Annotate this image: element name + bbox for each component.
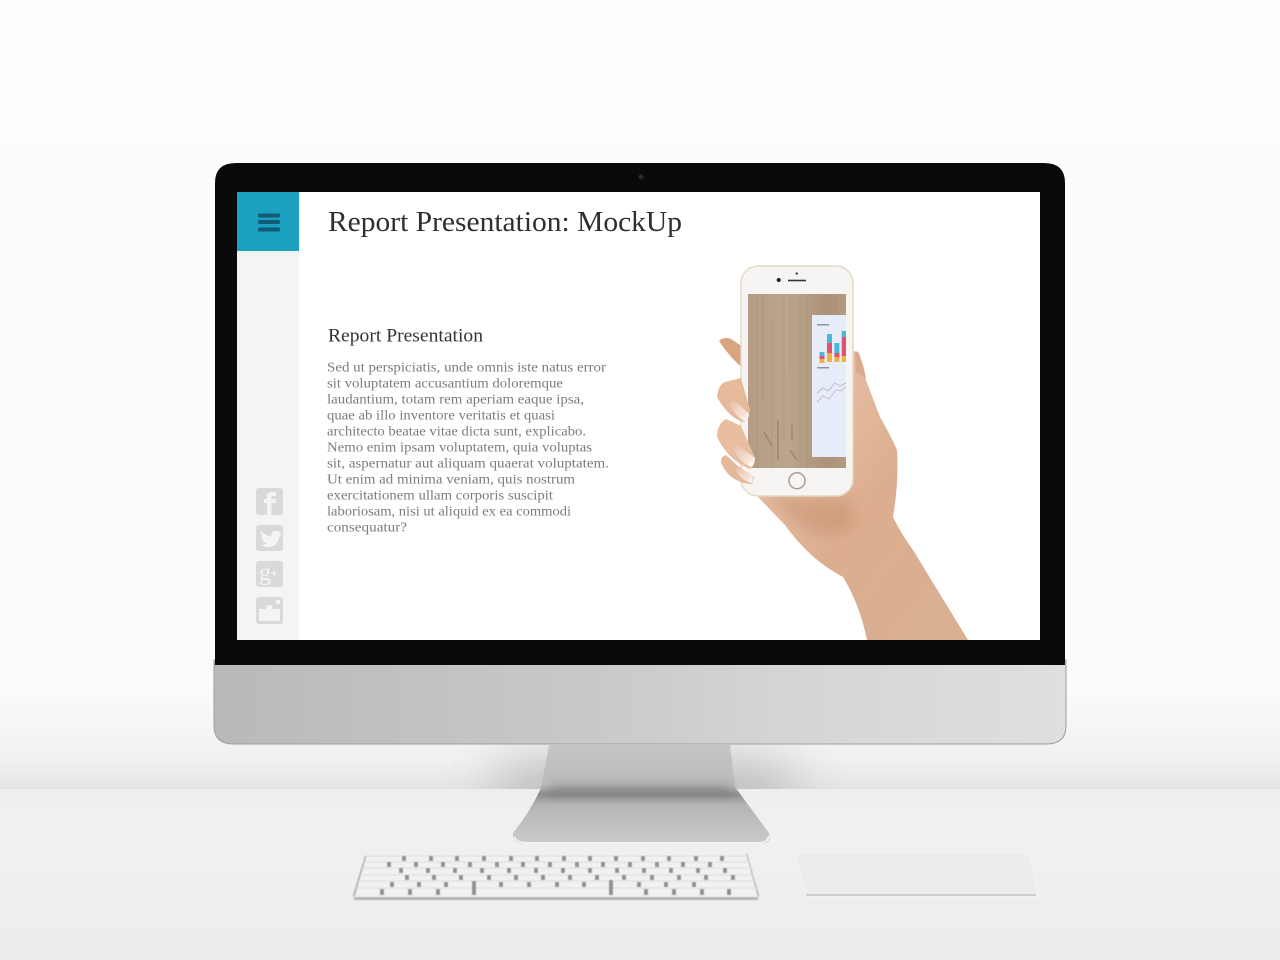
keyboard	[353, 853, 759, 900]
palm shading	[768, 498, 855, 535]
icon: google plus: g	[259, 560, 271, 586]
hand and forearm	[741, 350, 968, 640]
monitor stand	[513, 745, 770, 844]
monitor chin	[214, 660, 1066, 744]
text block: body copy: quae ab illo inventore veritatis et quasi	[327, 408, 555, 424]
wall shadow behind stand	[500, 765, 790, 815]
hand holding phone	[717, 266, 968, 640]
nail: index	[729, 401, 749, 421]
nail: middle	[732, 446, 755, 467]
stand base edge	[514, 836, 769, 843]
text block: body copy: sit, aspernatur aut aliquam quaerat voluptatem.	[327, 456, 609, 472]
text block: body copy: exercitationem ullam corporis suscipit	[327, 488, 553, 504]
text block: body copy: consequatur?	[327, 520, 407, 536]
monitor bezel	[215, 163, 1065, 665]
key gaps	[380, 856, 735, 895]
panel: sidebar	[237, 192, 299, 640]
icon: google plus	[256, 560, 283, 587]
stand shadow	[550, 785, 730, 795]
text block: body copy: sit voluptatem accusantium doloremque	[327, 376, 563, 392]
icon: twitter	[256, 525, 283, 551]
finger: ring	[721, 455, 754, 484]
webcam	[638, 174, 644, 180]
nail: ring	[735, 468, 753, 483]
line chart	[817, 383, 846, 402]
icon: hamburger menu	[258, 214, 280, 232]
keyboard bottom edge and sides	[353, 853, 759, 900]
stand base and neck	[513, 745, 770, 844]
menu button	[237, 192, 299, 251]
title: Report Presentation: MockUp	[328, 206, 682, 238]
subheading: Report Presentation	[328, 326, 483, 346]
trackpad	[797, 853, 1038, 898]
text block: body copy: Sed ut perspiciatis, unde omnis iste natus error	[327, 360, 606, 376]
bar chart	[820, 331, 846, 363]
text block: body copy	[327, 360, 609, 536]
text block: body copy: laudantium, totam rem aperiam eaque ipsa,	[327, 392, 584, 408]
finger: index	[717, 378, 750, 422]
finger: middle	[717, 419, 755, 469]
keyboard body	[353, 856, 759, 899]
earpiece and camera	[777, 272, 806, 282]
text block: body copy: Ut enim ad minima veniam, quis nostrum	[327, 472, 575, 488]
key rows	[356, 862, 757, 888]
icon: google plus: +	[271, 568, 277, 580]
monitor	[214, 163, 1066, 744]
icon: facebook	[256, 488, 283, 515]
text block: body copy: laboriosam, nisi ut aliquid ex ea commodi	[327, 504, 571, 520]
fingertip right	[855, 352, 866, 378]
phone	[741, 266, 853, 496]
icon: instagram	[256, 597, 283, 624]
home button	[789, 473, 805, 489]
text block: body copy: architecto beatae vitae dicta sunt, explicabo.	[327, 424, 586, 440]
phone screen: wood photo	[748, 294, 846, 468]
text block: body copy: Nemo enim ipsam voluptatem, quia voluptas	[327, 440, 592, 456]
screen	[237, 192, 1040, 640]
report paper with charts	[812, 315, 846, 457]
thumb finger behind phone	[719, 338, 745, 370]
